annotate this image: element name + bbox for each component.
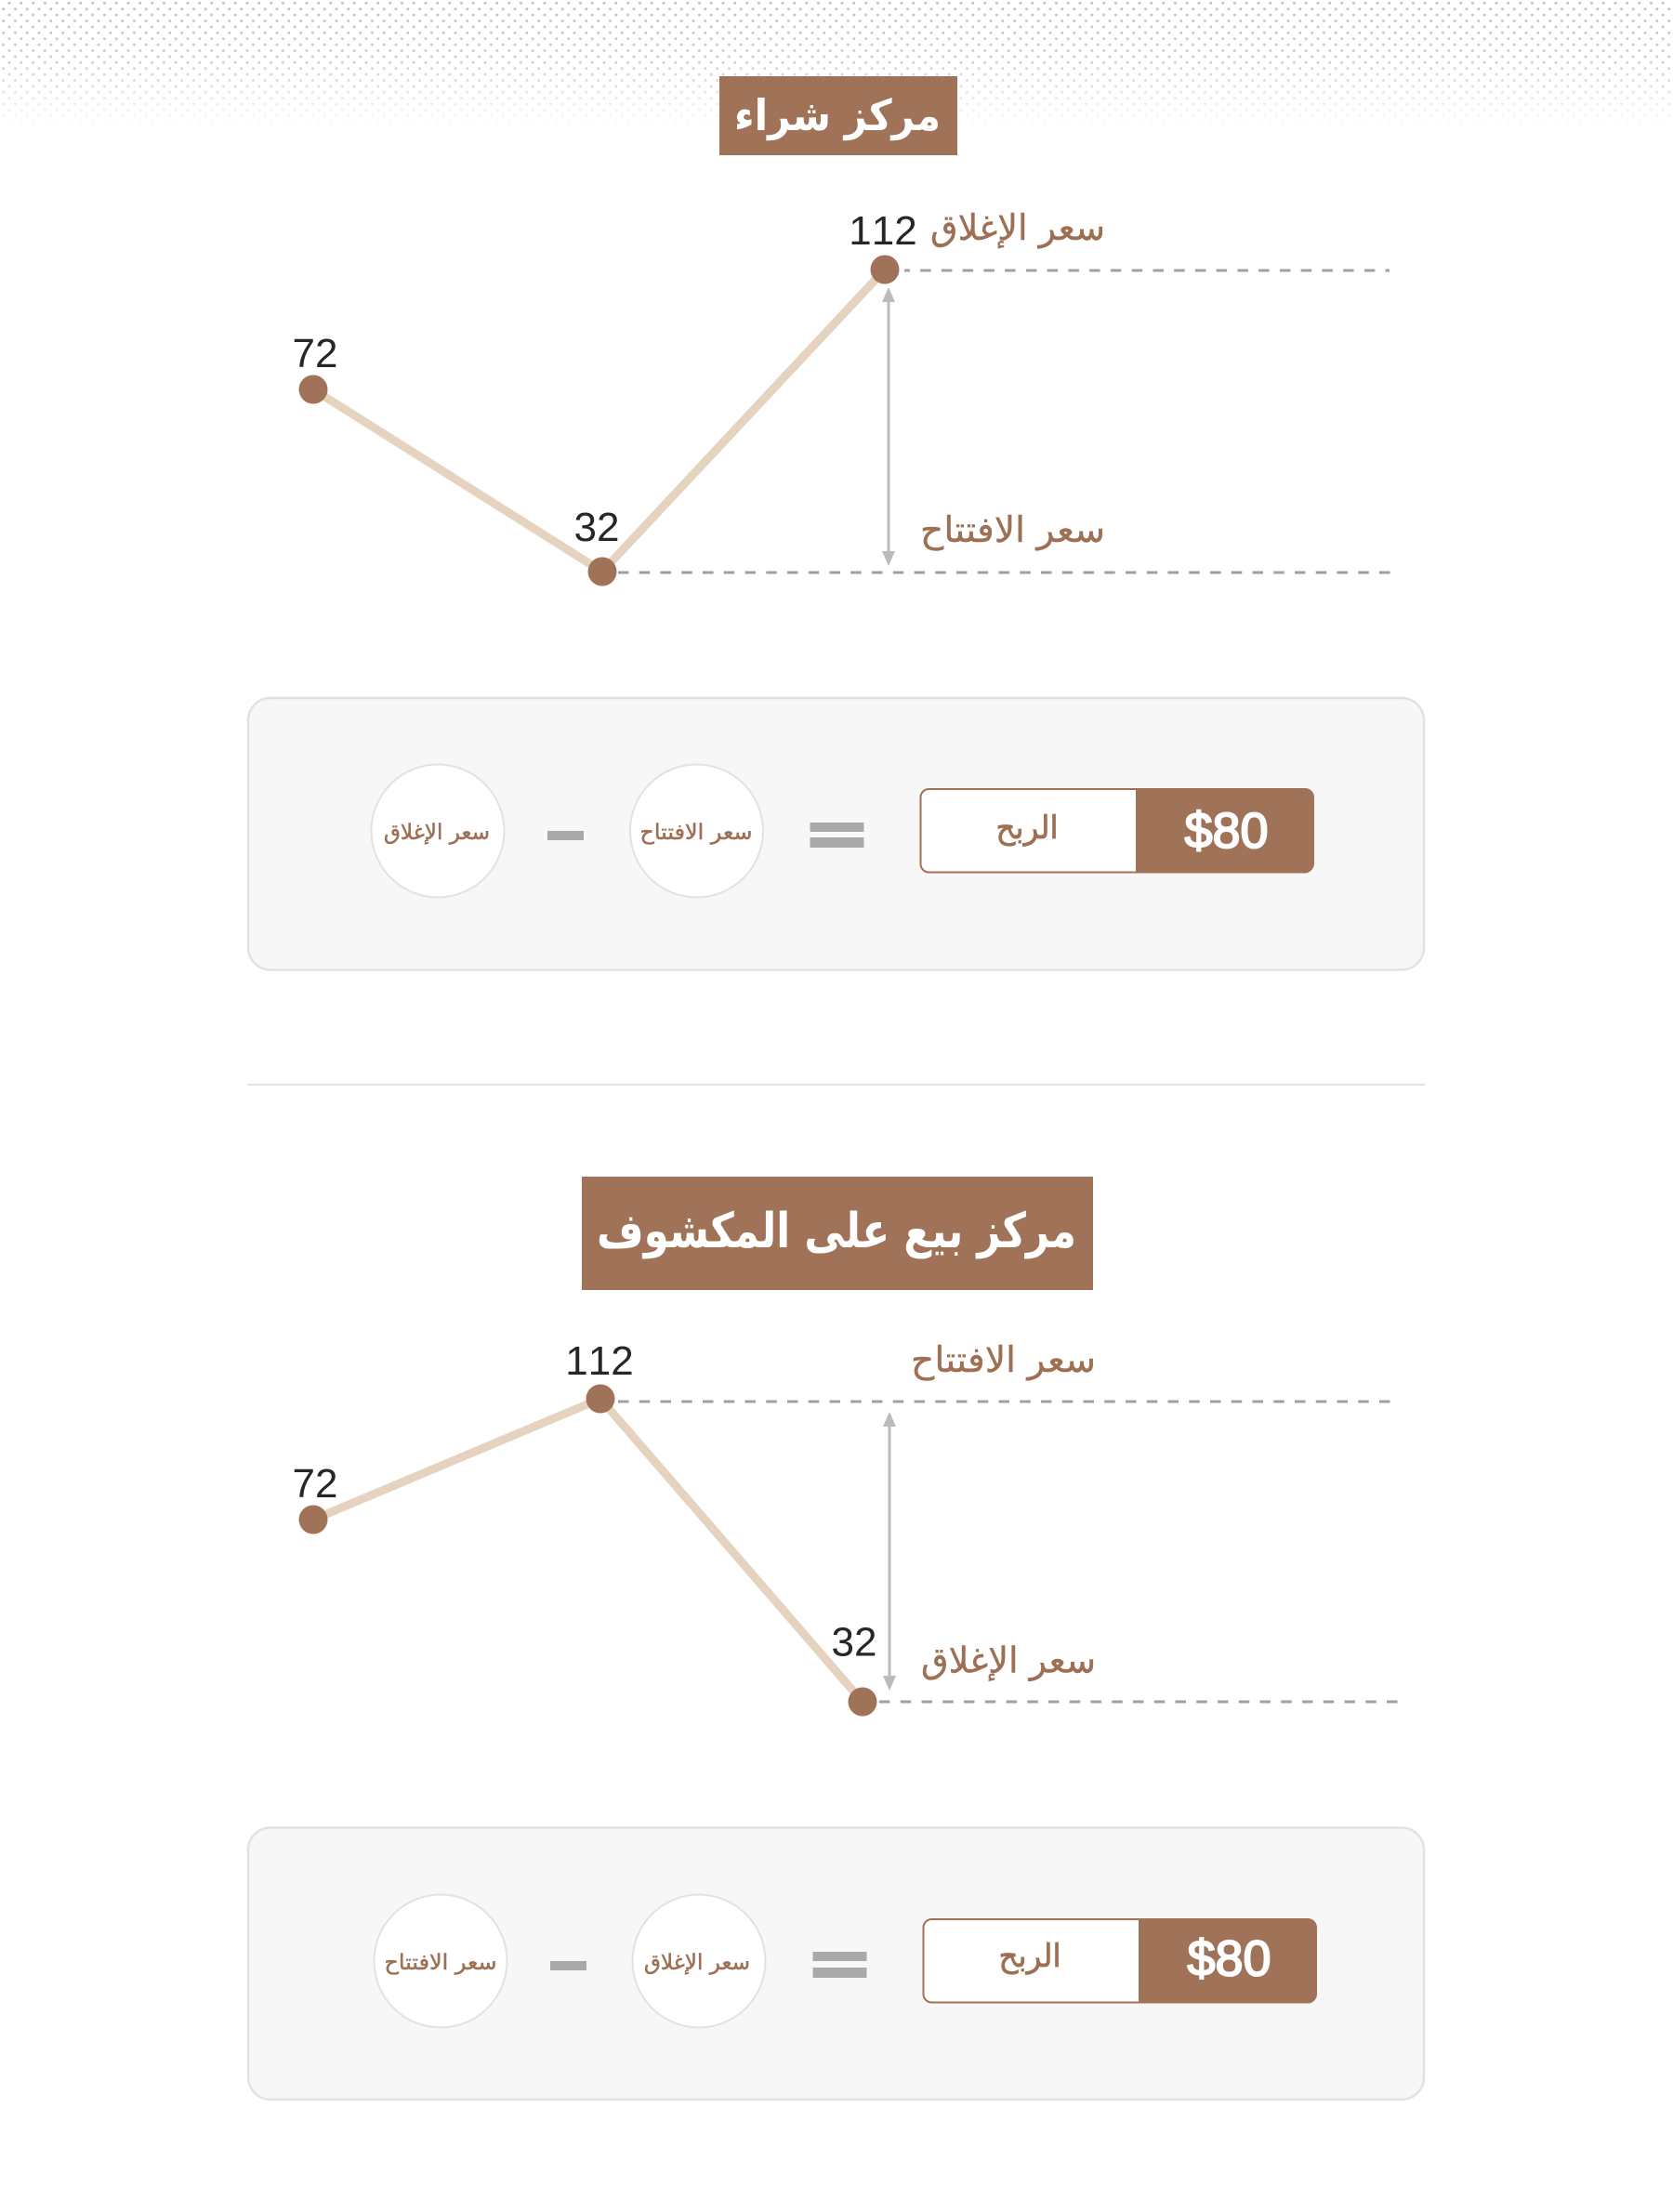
price line xyxy=(313,1399,863,1702)
heading: buy position xyxy=(719,76,957,155)
profit result box: $80 xyxy=(1187,1931,1271,1987)
closing price level xyxy=(879,1701,1402,1703)
double arrow xyxy=(883,1412,896,1691)
label: opening price: سعر الافتتاح xyxy=(920,509,1105,551)
profit result box: الربح xyxy=(996,810,1058,847)
circle: opening price xyxy=(374,1894,507,2028)
divider xyxy=(247,1084,1425,1086)
profit result box: $80 xyxy=(1184,803,1269,859)
equals sign xyxy=(810,823,864,848)
value 112: 112 xyxy=(849,208,917,254)
value 32: 32 xyxy=(574,505,619,550)
circle: closing price: سعر الإغلاق xyxy=(384,821,490,845)
circle: closing price xyxy=(632,1894,766,2028)
panel: short sell formula xyxy=(248,1827,1424,2100)
value 72: 72 xyxy=(293,331,337,376)
value 112: 112 xyxy=(565,1338,634,1384)
closing price level xyxy=(904,270,1390,271)
heading: short sell position xyxy=(582,1177,1093,1290)
circle: opening price: سعر الافتتاح xyxy=(639,821,753,845)
chart: buy position xyxy=(293,207,1390,586)
circle: opening price: سعر الافتتاح xyxy=(385,1951,496,1975)
circle: opening price xyxy=(630,764,763,898)
opening price level xyxy=(618,1400,1390,1403)
profit result box xyxy=(924,1918,1317,2004)
circle: closing price: سعر الإغلاق xyxy=(644,1951,750,1975)
panel: buy formula xyxy=(248,698,1424,970)
value 72: 72 xyxy=(293,1461,337,1507)
circle: closing price xyxy=(372,764,504,898)
minus sign xyxy=(547,831,584,840)
value 32: 32 xyxy=(832,1619,876,1666)
label: closing price: سعر الإغلاق xyxy=(921,1639,1096,1682)
data points xyxy=(299,1385,877,1716)
label: closing price: سعر الإغلاق xyxy=(930,207,1105,249)
profit result box: الربح xyxy=(998,1938,1061,1975)
label: opening price: سعر الافتتاح xyxy=(911,1339,1096,1381)
data points xyxy=(299,255,900,586)
heading: buy position: مركز شراء xyxy=(734,90,941,140)
profit result box xyxy=(920,788,1314,873)
minus sign xyxy=(550,1961,586,1970)
heading: short sell position: مركز بيع على المكشوف xyxy=(597,1204,1076,1259)
equals sign xyxy=(812,1952,866,1978)
dotted background pattern xyxy=(2,2,1671,117)
double arrow xyxy=(882,287,895,566)
price line xyxy=(313,270,885,572)
opening price level xyxy=(618,571,1390,574)
chart: short sell position xyxy=(293,1338,1402,1716)
